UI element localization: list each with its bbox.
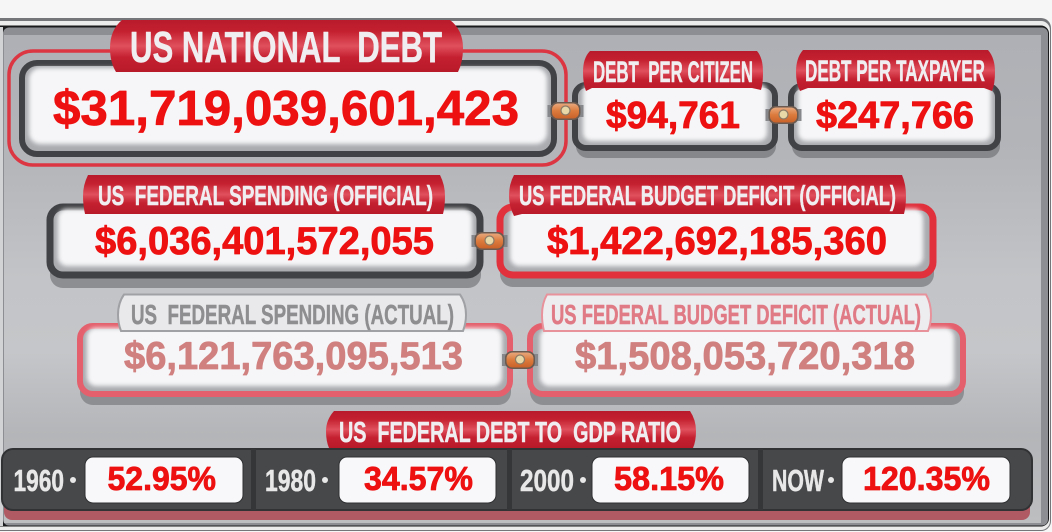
stat: 1960: 52.95% (108, 460, 216, 497)
panel: federal spending official (50, 175, 481, 288)
heading: federal spending actual: US FEDERAL SPENDING (ACTUAL) (131, 299, 454, 330)
panel: debt to GDP ratio (2, 411, 1032, 520)
heading: federal budget deficit actual (542, 294, 931, 331)
stat: 2000: 58.15% (614, 460, 724, 497)
value: debt per taxpayer: $247,766 (816, 95, 974, 137)
stat: 1980 (265, 457, 496, 503)
heading: debt per taxpayer (796, 50, 995, 91)
heading: debt to GDP ratio: US FEDERAL DEBT TO GDP RATIO (339, 417, 681, 449)
panel: federal spending actual (80, 294, 511, 405)
heading: debt to GDP ratio (326, 411, 696, 449)
connector (502, 351, 538, 369)
stat: 1980: 1980 (265, 463, 316, 498)
value: federal budget deficit official: $1,422,692,185,360 (547, 220, 887, 263)
heading: US national debt: US NATIONAL DEBT (130, 23, 442, 72)
stat: 1980: 34.57% (364, 460, 473, 497)
stat: now: NOW (772, 463, 825, 498)
stat: 1960: 1960 (14, 463, 64, 498)
panel: federal budget deficit actual (530, 294, 964, 405)
heading: federal spending official: US FEDERAL SPENDING (OFFICIAL) (98, 180, 433, 211)
heading: federal spending official (83, 175, 445, 214)
connector (548, 102, 584, 120)
heading: federal spending actual (118, 294, 466, 331)
value: federal spending actual: $6,121,763,095,513 (124, 335, 463, 378)
value: debt per citizen: $94,761 (606, 95, 740, 137)
heading: debt per citizen (583, 51, 763, 91)
panel: debt per taxpayer (791, 50, 1000, 158)
stat: 2000: 2000 (520, 463, 574, 498)
heading: federal budget deficit official (509, 175, 906, 216)
stat: now: 120.35% (863, 460, 990, 497)
heading: debt per citizen: DEBT PER CITIZEN (593, 56, 753, 89)
panel: debt per citizen (575, 51, 776, 158)
stat: 1960 (14, 457, 243, 503)
panel: federal budget deficit official (500, 175, 934, 287)
panel: US national debt (9, 20, 566, 165)
connector (766, 106, 802, 124)
stat: now (772, 457, 1010, 503)
value: federal spending official: $6,036,401,572,055 (95, 220, 434, 263)
value: national debt: $31,719,039,601,423 (53, 82, 519, 136)
value: federal budget deficit actual: $1,508,053,720,318 (575, 335, 915, 378)
stat: 2000 (520, 457, 749, 503)
heading: US national debt (110, 20, 463, 72)
connector (472, 232, 508, 250)
